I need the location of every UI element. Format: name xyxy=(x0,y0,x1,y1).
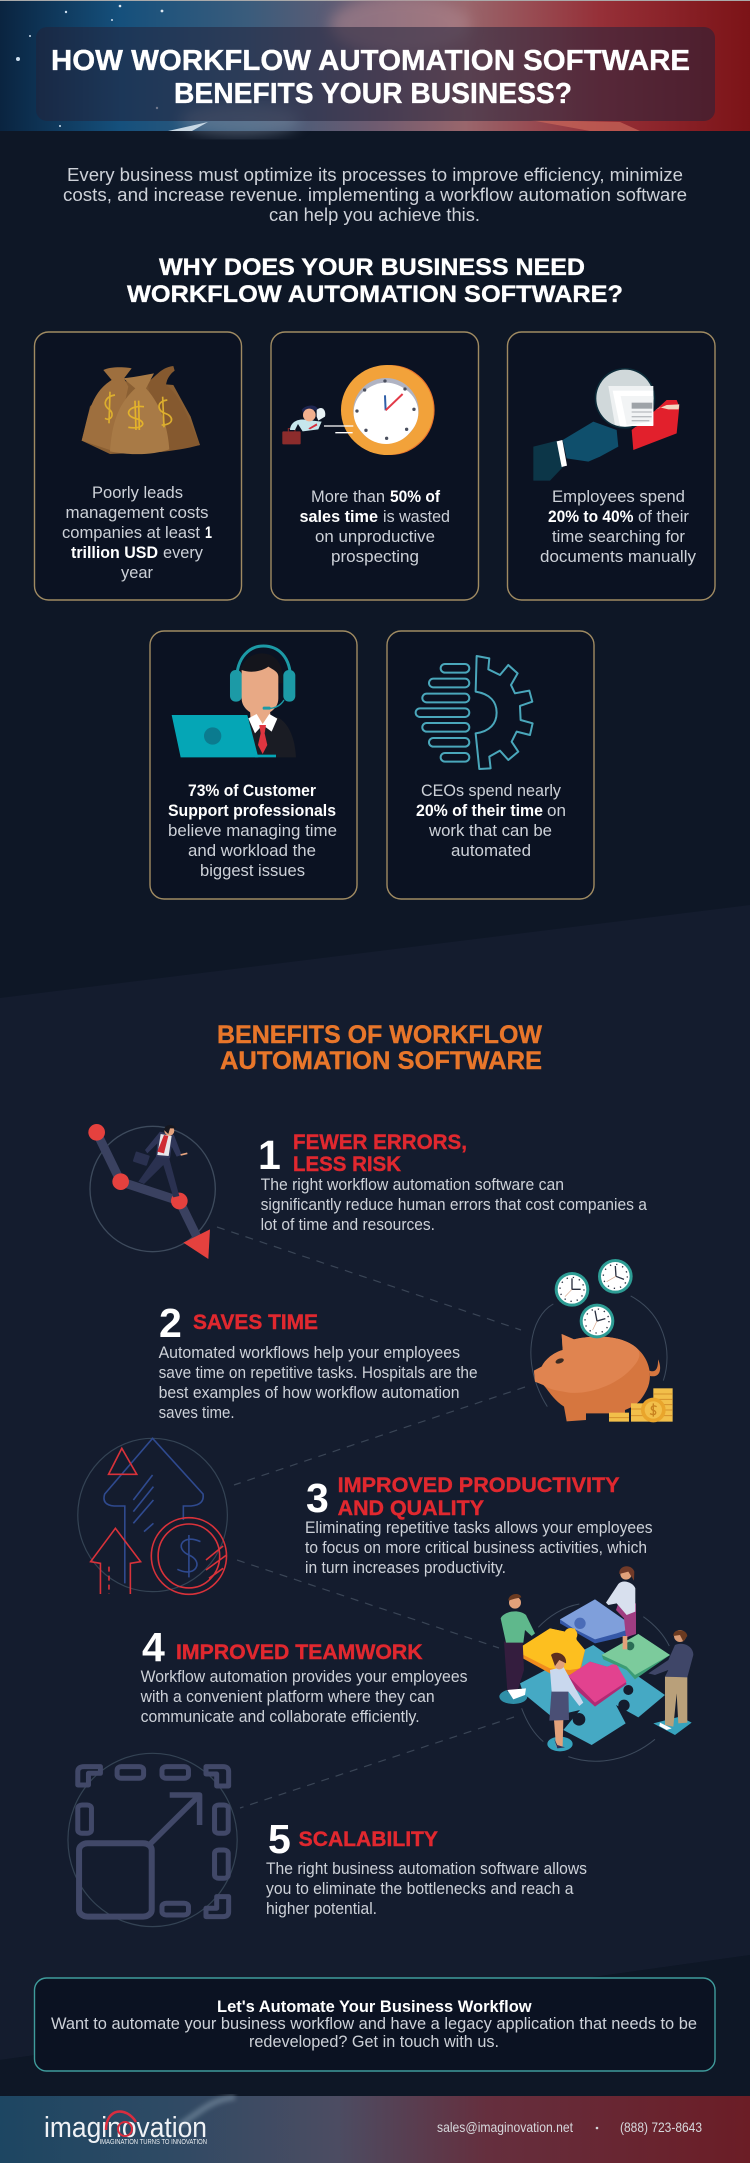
item 3: improved productivity: 3 xyxy=(306,1475,329,1521)
text: leads: 1 xyxy=(205,524,212,542)
icon: half gear and pills xyxy=(416,656,533,769)
item 2: saves time: SAVES TIME xyxy=(193,1311,318,1334)
icon: money bags xyxy=(82,366,200,454)
connector: dashed lines xyxy=(217,1227,525,1808)
item 5: scalability: you to eliminate the bottlenecks and reach a xyxy=(266,1880,574,1898)
person: man in navy sweater xyxy=(648,1630,693,1730)
text: support: biggest issues xyxy=(200,862,305,880)
text: documents: documents manually xyxy=(540,548,697,566)
intro text: can help you achieve this. xyxy=(269,205,480,225)
item 1: fewer errors: The right workflow automation software can xyxy=(261,1176,564,1194)
heading: why: WHY DOES YOUR BUSINESS NEED xyxy=(159,254,585,281)
item 1: fewer errors: LESS RISK xyxy=(293,1153,401,1176)
text: leads: every xyxy=(163,544,204,562)
callout: call to action: redeveloped? Get in touch with us. xyxy=(249,2033,499,2051)
text: documents: time searching for xyxy=(552,528,686,546)
item 3: improved productivity xyxy=(305,1474,653,1577)
intro text: costs, and increase revenue. implementing a workflow automation software xyxy=(63,185,687,205)
icon: clock with businessman xyxy=(282,365,435,455)
item 2: saves time: save time on repetitive tasks. Hospitals are the xyxy=(159,1364,478,1382)
item 2: saves time: best examples of how workflow automation xyxy=(159,1384,460,1402)
text: support: and workload the xyxy=(188,842,316,860)
callout: call to action: Let's Automate Your Business Workflow xyxy=(217,1997,532,2016)
item 1: fewer errors xyxy=(258,1131,648,1234)
item 4: improved teamwork xyxy=(140,1624,468,1726)
text: sales xyxy=(300,488,450,566)
person: woman in grey skirt xyxy=(549,1653,583,1748)
text: leads: Poorly leads xyxy=(92,484,183,502)
text: sales: on unproductive xyxy=(315,528,435,546)
panel: document search xyxy=(508,332,715,600)
item 1: fewer errors: FEWER ERRORS, xyxy=(293,1131,467,1154)
footer banner xyxy=(0,2096,750,2163)
text: sales: More than xyxy=(311,488,385,506)
item 1: fewer errors: 1 xyxy=(258,1132,281,1178)
text: sales: 50% of xyxy=(390,488,440,506)
text: CEOs: 20% of their time xyxy=(416,802,543,820)
text: sales: sales time xyxy=(300,508,378,526)
lower section background xyxy=(0,905,750,2060)
item 4: improved teamwork: with a convenient platform where they can xyxy=(140,1688,435,1706)
text: sales: is wasted xyxy=(383,508,450,526)
intro text: Every business must optimize its processes to improve efficiency, minimize xyxy=(67,165,683,185)
text: CEOs: work that can be xyxy=(428,822,552,840)
logo: IMAGINATION TURNS TO INNOVATION xyxy=(100,2139,207,2146)
person: man in green xyxy=(501,1594,535,1699)
title: BENEFITS YOUR BUSINESS? xyxy=(174,78,572,110)
text: leads: year xyxy=(121,564,153,582)
item 2: saves time xyxy=(159,1300,478,1422)
text: leads: management costs xyxy=(66,504,208,522)
text: support xyxy=(168,782,337,880)
item 1: fewer errors: significantly reduce human errors that cost companies a xyxy=(261,1196,648,1214)
text: CEOs: CEOs spend nearly xyxy=(421,782,562,800)
person: woman in purple skirt xyxy=(606,1566,636,1649)
panel: CEOs xyxy=(387,631,594,899)
item 5: scalability: SCALABILITY xyxy=(299,1828,438,1851)
item 3: improved productivity: in turn increases productivity. xyxy=(305,1559,506,1577)
icon: support agent with laptop xyxy=(172,646,296,757)
heading: why: WORKFLOW AUTOMATION SOFTWARE? xyxy=(127,281,623,308)
text: support: believe managing time xyxy=(168,822,337,840)
text: CEOs: on xyxy=(547,802,566,820)
heading: benefits: BENEFITS OF WORKFLOW xyxy=(217,1021,542,1049)
text: CEOs xyxy=(416,782,566,860)
text: sales: prospecting xyxy=(331,548,419,566)
text: CEOs: automated xyxy=(451,842,531,860)
item 5: scalability: higher potential. xyxy=(266,1900,377,1918)
item 4: improved teamwork: IMPROVED TEAMWORK xyxy=(176,1641,423,1664)
item 2: saves time: 2 xyxy=(159,1300,182,1346)
contact details: (888) 723-8643 xyxy=(620,2119,702,2135)
header banner xyxy=(0,0,750,136)
item 5: scalability: 5 xyxy=(268,1816,291,1862)
lower corner background xyxy=(0,1955,750,2096)
item 5: scalability: The right business automation software allows xyxy=(266,1860,587,1878)
text: documents: Employees spend xyxy=(552,488,685,506)
item 2: saves time: saves time. xyxy=(159,1404,235,1422)
item 3: improved productivity: IMPROVED PRODUCTIVITY xyxy=(338,1474,620,1497)
item 4: improved teamwork: 4 xyxy=(142,1624,165,1670)
icon: falling graph with businessman xyxy=(88,1124,215,1259)
text: support: Support professionals xyxy=(168,802,336,820)
icon: piggy bank with clocks and coins xyxy=(531,1259,673,1422)
icon: team assembling puzzle xyxy=(499,1566,693,1761)
title: HOW WORKFLOW AUTOMATION SOFTWARE xyxy=(51,45,690,77)
icon: scaling square xyxy=(68,1753,237,1927)
text: leads: trillion USD xyxy=(71,544,158,562)
text: leads: companies at least xyxy=(62,524,200,542)
heading: benefits xyxy=(217,1021,542,1075)
text: leads xyxy=(62,484,212,582)
icon: magnifier, hand and folder xyxy=(533,368,679,481)
title xyxy=(51,45,690,110)
item 3: improved productivity: AND QUALITY xyxy=(338,1497,484,1520)
text: documents: 20% to 40% xyxy=(548,508,634,526)
text: documents: of their xyxy=(638,508,690,526)
contact details: sales@imaginovation.net xyxy=(437,2119,573,2135)
item 2: saves time: Automated workflows help your employees xyxy=(159,1344,460,1362)
title box xyxy=(36,27,715,121)
item 5: scalability xyxy=(266,1816,587,1918)
icon: growth arrows and coin xyxy=(78,1438,227,1594)
item 1: fewer errors: lot of time and resources. xyxy=(261,1216,435,1234)
item 3: improved productivity: to focus on more critical business activities, which xyxy=(305,1539,647,1557)
panel: customer support xyxy=(150,631,357,899)
logo: imaginovation xyxy=(44,2112,207,2144)
text: documents xyxy=(540,488,697,566)
heading: why xyxy=(127,254,623,308)
intro text xyxy=(63,165,687,225)
item 4: improved teamwork: Workflow automation provides your employees xyxy=(141,1668,468,1686)
callout: call to action xyxy=(34,1978,715,2071)
heading: benefits: AUTOMATION SOFTWARE xyxy=(220,1047,542,1075)
panel: leads management cost xyxy=(34,332,242,600)
item 4: improved teamwork: communicate and collaborate efficiently. xyxy=(141,1708,420,1726)
contact details xyxy=(437,2119,702,2135)
text: support: 73% of Customer xyxy=(188,782,317,800)
callout: call to action: Want to automate your business workflow and have a legacy application that needs to be xyxy=(51,2015,697,2033)
item 3: improved productivity: Eliminating repetitive tasks allows your employees xyxy=(305,1519,653,1537)
panel: sales time xyxy=(271,332,478,600)
